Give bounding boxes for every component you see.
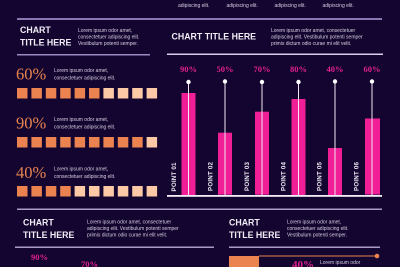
heading: bottom right title	[229, 218, 280, 240]
panel: centre bar chart	[167, 28, 383, 197]
point labels: POINT 01	[171, 162, 178, 192]
60% row: Lorem ipsum odor amet,	[54, 68, 108, 74]
heading: left chart title	[20, 25, 71, 48]
heading: bar chart title: CHART TITLE HERE	[172, 32, 256, 42]
heading: left chart title: CHART	[20, 25, 51, 35]
60% row	[16, 64, 157, 98]
panel: bottom left chart	[15, 218, 214, 267]
value labels	[180, 64, 380, 74]
60% row: 60%	[16, 64, 46, 84]
40% row	[16, 163, 157, 196]
top row text fragments	[178, 0, 354, 9]
text block: bottom right description	[287, 220, 348, 238]
text block: left chart description	[78, 28, 139, 47]
text block: bottom right description: consectetuer adipiscing elit.	[287, 226, 348, 232]
point labels	[171, 162, 360, 192]
90% row: consectetuer adipiscing elit.	[54, 124, 115, 130]
text block: bar note: Lorem ipsum odor	[320, 260, 361, 266]
top row text fragments: adipiscing elit.	[322, 3, 354, 9]
heading: bottom left title: TITLE HERE	[23, 230, 74, 240]
value labels: 90%	[31, 252, 48, 262]
panel: bottom right chart	[229, 218, 380, 267]
value labels: 40%	[326, 64, 344, 74]
point labels: POINT 05	[316, 162, 324, 191]
bars	[182, 93, 380, 195]
text block: bottom left description	[87, 220, 179, 238]
text block: bottom right description: Vestibulum potenti semper.	[287, 232, 347, 238]
90% row: 90%	[16, 114, 46, 132]
text block: bottom left description: adipiscing elit. Vestibulum potenti semper	[87, 226, 179, 232]
90% row: Lorem ipsum odor amet,	[54, 117, 108, 123]
point labels: POINT 04	[280, 162, 288, 191]
point labels: POINT 03	[244, 162, 251, 191]
text block: bar chart description: adipiscing elit. Vestibulum potenti semper	[271, 34, 363, 40]
heading: bottom right title: CHART	[229, 218, 260, 228]
panel: left percentage chart	[16, 25, 157, 196]
value labels: 90%	[180, 64, 197, 74]
40% row: Lorem ipsum odor amet,	[54, 166, 108, 172]
heading: bottom left title	[23, 218, 74, 240]
text block: bottom left description: primis dictum odio curae mi elit velit.	[87, 232, 167, 238]
text block: bar chart description: Lorem ipsum odor amet, consectetuer	[271, 28, 356, 34]
text block: left chart description: Vestibulum potenti semper.	[78, 41, 138, 47]
top row text fragments: adipiscing elit.	[226, 3, 258, 9]
value lines and dots	[188, 81, 372, 195]
top row text fragments: adipiscing elit.	[178, 3, 209, 9]
value labels: 60%	[364, 64, 380, 74]
60% row: consectetuer adipiscing elit.	[54, 76, 115, 82]
top row text fragments: adipiscing elit.	[274, 3, 306, 9]
heading: left chart title: TITLE HERE	[20, 38, 71, 48]
40% row: 40%	[16, 163, 46, 182]
point labels: POINT 06	[354, 162, 360, 191]
value labels: 80%	[290, 64, 307, 74]
point labels: POINT 02	[208, 162, 214, 191]
text block: bottom right description: Lorem ipsum odor amet,	[287, 220, 341, 226]
value labels: 50%	[216, 64, 234, 74]
value labels: 70%	[254, 64, 270, 74]
bar track and dot	[259, 254, 379, 258]
heading: bottom left title: CHART	[23, 218, 54, 228]
text block: left chart description: Lorem ipsum odor amet,	[78, 28, 132, 34]
text block: bar chart description	[271, 28, 363, 47]
text block: bottom left description: Lorem ipsum odor amet, consectetuer	[87, 220, 172, 226]
heading: bottom right title: TITLE HERE	[229, 230, 280, 240]
text block: bar chart description: primis dictum odio curae mi elit velit.	[271, 41, 351, 47]
90% row	[16, 114, 157, 148]
orange bar	[229, 256, 259, 267]
text block: left chart description: consectetuer adipiscing elit.	[78, 34, 139, 40]
40% row: consectetuer adipiscing elit.	[54, 174, 115, 180]
value labels	[31, 252, 98, 267]
